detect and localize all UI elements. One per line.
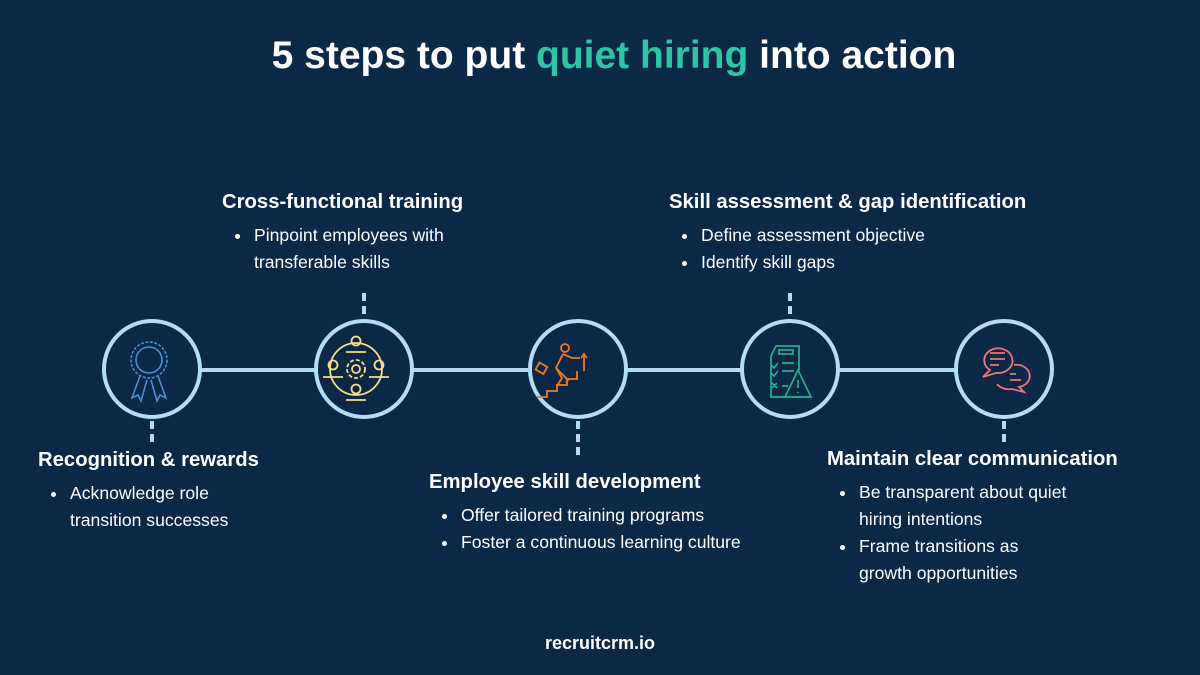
step 5 text: Be transparent about quiet xyxy=(859,482,1066,502)
step 2 text xyxy=(222,191,463,272)
step 1 text: Recognition & rewards xyxy=(38,449,259,471)
icon: checklist warning xyxy=(742,321,838,417)
icon: climbing stairs xyxy=(530,321,626,417)
step 3 text: Offer tailored training programs xyxy=(461,505,704,525)
step 1 text xyxy=(38,449,259,530)
footer: recruitcrm.io xyxy=(545,633,655,653)
step 4 text: Define assessment objective xyxy=(701,225,925,245)
step 2 text: transferable skills xyxy=(254,252,390,272)
step 4 text xyxy=(669,191,1026,272)
step 5 text: growth opportunities xyxy=(859,563,1017,583)
step 5 text: Maintain clear communication xyxy=(827,448,1118,470)
title: 5 steps to put quiet hiring into action xyxy=(272,34,956,77)
icon: team gear xyxy=(316,321,412,417)
step 5 text: hiring intentions xyxy=(859,509,982,529)
icon: chat bubbles xyxy=(956,321,1052,417)
step 3 text: Employee skill development xyxy=(429,471,701,493)
step 1 text: Acknowledge role xyxy=(70,483,209,503)
step 3 text: Foster a continuous learning culture xyxy=(461,532,741,552)
icon: award ribbon xyxy=(104,321,200,417)
step 5 text: Frame transitions as xyxy=(859,536,1018,556)
step 5 text xyxy=(827,448,1118,583)
step 1 text: transition successes xyxy=(70,510,228,530)
step 2 text: Pinpoint employees with xyxy=(254,225,444,245)
step 2 text: Cross-functional training xyxy=(222,191,463,213)
step 4 text: Skill assessment & gap identification xyxy=(669,191,1026,213)
step 3 text xyxy=(429,471,741,552)
step 4 text: Identify skill gaps xyxy=(701,252,835,272)
